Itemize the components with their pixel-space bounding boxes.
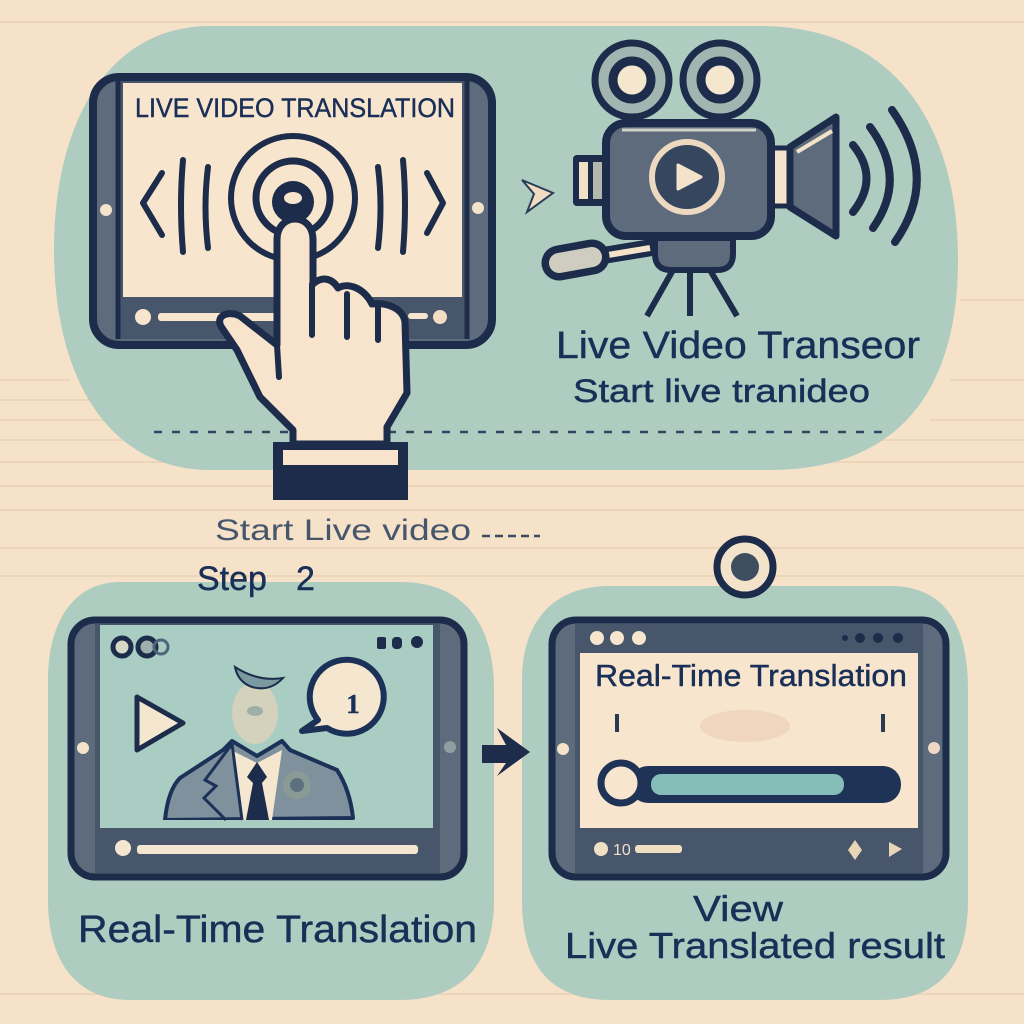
tablet: live video translation screen <box>93 77 492 345</box>
window controls <box>113 636 423 656</box>
arrow: tablet to camera <box>522 180 553 212</box>
player controls <box>594 840 902 860</box>
window controls <box>590 631 903 645</box>
dashed separator <box>154 431 890 433</box>
presenter <box>160 667 358 826</box>
label: step 2: Step <box>197 560 267 598</box>
label: start live video: Start Live video <box>215 514 471 547</box>
caption: real-time translation: Real-Time Translation <box>78 909 477 951</box>
play triangle <box>137 697 183 750</box>
blurred text placeholder <box>700 710 790 742</box>
side port <box>573 155 607 206</box>
caption: view live translated result <box>565 888 945 966</box>
shirt cuff <box>273 442 408 500</box>
arrow: step 2 to step 3 <box>482 728 530 776</box>
icon: record circle <box>717 539 773 595</box>
icon: pointing hand <box>220 219 408 500</box>
sound waves <box>853 110 917 242</box>
caption: view live translated result: View <box>693 888 784 929</box>
handle <box>559 247 655 263</box>
film reels <box>595 43 757 117</box>
speech bubble <box>302 660 384 734</box>
play button <box>652 142 722 212</box>
sound waves and chevrons <box>143 160 443 252</box>
result heading: Real-Time Translation <box>595 658 907 693</box>
step 1 caption: Start live tranideo <box>573 373 870 409</box>
player controls: 10 <box>613 842 631 859</box>
tripod head <box>655 238 733 270</box>
video player: presenter <box>71 620 464 877</box>
touch target rings <box>231 136 355 260</box>
icon: movie camera <box>559 43 917 316</box>
lens <box>770 117 836 236</box>
tablet progress bar <box>135 309 447 325</box>
panel: step 1 teal background <box>54 26 958 470</box>
tick marks <box>617 714 883 732</box>
panel: step 3 teal background <box>522 586 968 1000</box>
progress bar <box>115 840 418 856</box>
translated result window <box>552 620 946 877</box>
translation progress bar <box>601 763 901 803</box>
panel: step 2 teal background <box>48 582 494 1000</box>
tablet heading: LIVE VIDEO TRANSLATION <box>135 93 455 123</box>
tripod <box>647 270 737 316</box>
caption: view live translated result: Live Translated result <box>565 925 945 966</box>
body <box>606 123 771 236</box>
step 1 caption: Live Video Transeor <box>556 325 920 367</box>
label: step 2: 2 <box>296 560 315 598</box>
step 1 caption <box>556 325 920 409</box>
speech bubble: 1 <box>346 689 360 719</box>
